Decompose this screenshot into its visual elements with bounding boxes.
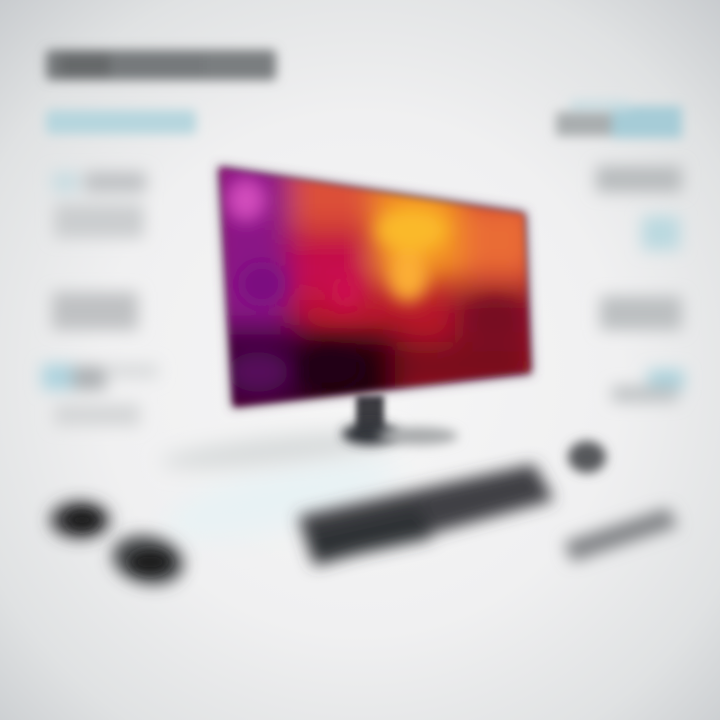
right text block 4 [612, 370, 684, 402]
subtitle [46, 110, 196, 134]
desk shadow [159, 424, 401, 476]
monitor stand [342, 395, 458, 445]
monitor [200, 150, 550, 445]
monitor frame halo [218, 166, 532, 408]
earbud left [50, 501, 110, 539]
stylus bar [564, 508, 678, 562]
monitor screen gradient [214, 163, 536, 411]
right text block 2 [642, 216, 680, 250]
keyboard [298, 464, 554, 566]
left text block 3 [42, 364, 158, 426]
title [46, 50, 276, 80]
right text block 3 [600, 296, 682, 330]
mouse [568, 441, 606, 473]
right text block 1 [596, 166, 682, 192]
right heading [556, 100, 682, 138]
left text block 2 [52, 292, 138, 330]
earbud right [108, 529, 188, 591]
left text block 1 [52, 172, 146, 238]
desk glow reflection [156, 440, 404, 556]
